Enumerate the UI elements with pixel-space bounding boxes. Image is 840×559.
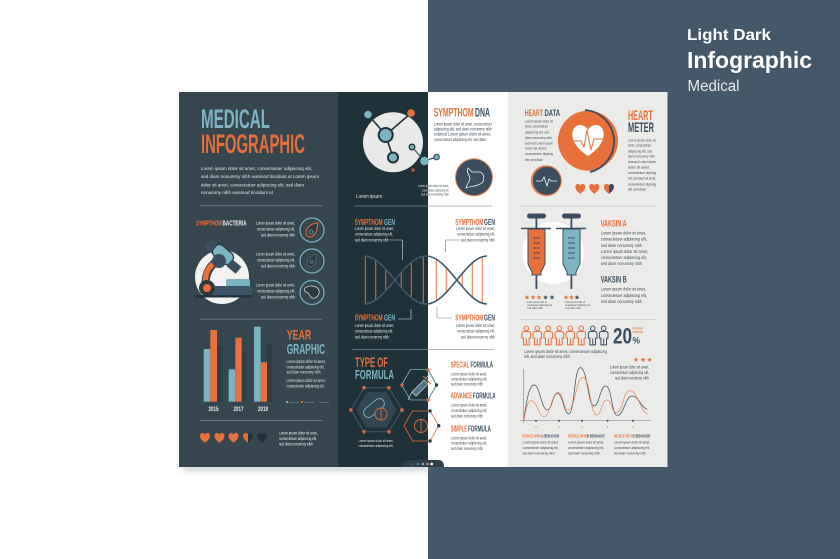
intro text: nonummy nibh euismod tincidunt ut bbox=[201, 190, 274, 196]
dna text bbox=[434, 122, 493, 142]
vaksin a: consectetuer adipiscing elit, bbox=[601, 236, 647, 242]
panel: right light page bbox=[508, 92, 668, 467]
heading: gene bottom left: GEN bbox=[384, 314, 395, 323]
bacteria text blocks: consectetuer adipiscing elit, bbox=[257, 288, 295, 294]
bacteria text blocks: Lorem ipsum dolor sit amet, bbox=[256, 220, 295, 226]
capsule caption: Lorem ipsum dolor sit amet, bbox=[358, 438, 394, 443]
bacteria text blocks: sed diam nonummy nibh bbox=[261, 264, 295, 268]
intro text: sed diam nonummy nibh euismod tincidunt ut Lorem ipsum bbox=[201, 174, 319, 180]
vaksin b bbox=[601, 275, 647, 304]
behaviour column one: PEOPLE WITH bbox=[522, 434, 542, 440]
formula: advance: sed diam nonummy nibh bbox=[451, 413, 483, 418]
main heading: MEDICAL bbox=[201, 104, 270, 134]
capsule caption: consectetuer adipiscing elit, bbox=[358, 443, 394, 448]
gene text bottom right: sed diam nonummy nibh bbox=[461, 335, 495, 340]
hearts text: Lorem ipsum dolor sit amet, bbox=[279, 430, 318, 436]
gene text top right: Lorem ipsum dolor sit amet, bbox=[456, 226, 495, 231]
hearts text: consectetuer adipiscing elit, bbox=[279, 436, 317, 441]
intro text: dolor sit amet, consectetuer adipiscing elit, sed diam bbox=[201, 182, 304, 188]
formula: special: Lorem ipsum dolor sit amet, bbox=[451, 371, 487, 376]
dna text: euismod Lorem ipsum dolor sit amet, bbox=[434, 132, 491, 136]
vaksin a bbox=[601, 219, 648, 266]
gene text bottom right bbox=[456, 323, 495, 340]
icon: stomach bbox=[455, 158, 493, 196]
heading: symptom bacteria: SYMPTHOM bbox=[196, 218, 222, 228]
gene text top right bbox=[456, 226, 495, 242]
bacteria text blocks: Lorem ipsum dolor sit amet, bbox=[256, 252, 295, 256]
heading: heart meter bbox=[628, 107, 654, 135]
chart note: Lorem ipsum dolor sit amet, bbox=[610, 364, 649, 370]
star rating captions: sed diam nibh bbox=[565, 307, 582, 310]
behaviour column one bbox=[522, 434, 559, 456]
formula: special: SPECIAL bbox=[451, 360, 469, 369]
vaksin b: consectetuer adipiscing elit, bbox=[601, 293, 647, 298]
heart meter text: diam nonummy nibh bbox=[628, 154, 655, 159]
panel: centre dark and white page bbox=[338, 92, 508, 467]
gene text top right: sed diam nonummy nibh bbox=[461, 237, 495, 242]
bacteria text blocks: sed diam nonummy nibh bbox=[261, 294, 295, 300]
intro text bbox=[201, 166, 319, 196]
heading: year graphic: GRAPHIC bbox=[287, 341, 325, 358]
molecule note on dark side bbox=[418, 184, 428, 196]
heading: heart data: DATA bbox=[544, 108, 560, 118]
heading: symptom dna: DNA bbox=[475, 106, 490, 120]
formula: advance bbox=[451, 392, 496, 418]
icon: bacteria three bbox=[300, 280, 324, 304]
heart data text: consectetuer diploing bbox=[525, 151, 553, 156]
hexagon: capsule icon bbox=[349, 386, 404, 434]
behaviour column one: sed diam nonummy nibh bbox=[522, 450, 554, 456]
formula: simple: FORMULA bbox=[468, 425, 491, 434]
icon: microscope bbox=[194, 239, 252, 304]
heart data text: diam nonummy nibh bbox=[525, 135, 552, 140]
behaviour column two bbox=[568, 434, 605, 456]
bar chart: 2015 bbox=[208, 407, 219, 413]
behaviour column three: Lorem ipsum dolor sit amet, bbox=[614, 440, 650, 444]
heart meter text: adipiscing elit, sed bbox=[628, 148, 652, 153]
behaviour column two: Lorem ipsum dolor sit amet, bbox=[568, 440, 604, 444]
heart data text: dolor sit amet, bbox=[525, 146, 547, 151]
molecule note on dark side: Lorem ipsum dolor sit amet, bbox=[418, 184, 449, 188]
star rating captions: Lorem ipsum dolor sit bbox=[565, 301, 585, 304]
gene text bottom right: consectetuer adipiscing elit, bbox=[457, 329, 495, 334]
behaviour column one: Lorem ipsum dolor sit amet, bbox=[522, 440, 558, 444]
heart meter text: consectetuer diploing bbox=[628, 181, 656, 186]
brand title: Infographic bbox=[687, 47, 812, 73]
heading: gene top right: SYMPTHOM bbox=[455, 218, 483, 227]
star rating captions: Lorem ipsum dolor sit bbox=[527, 301, 547, 304]
molecule note on white side: sed diam nonummy nibh bbox=[421, 193, 449, 197]
star rating captions: consectetuer adipiscing elit bbox=[527, 304, 552, 307]
molecule note on dark side: sed diam nonummy nibh bbox=[421, 193, 449, 197]
hearts text: sed diam nonummy nibh bbox=[279, 442, 313, 446]
dna text: Lorem ipsum dolor sit amet, consectetuer bbox=[434, 122, 492, 126]
year graphic text: consectetuer adipiscing elit, bbox=[286, 364, 324, 370]
bacteria text blocks: Lorem ipsum dolor sit amet, bbox=[256, 282, 295, 288]
vaksin b: VAKSIN B bbox=[601, 275, 627, 285]
vaksin b: sed diam nonummy nibh bbox=[601, 299, 642, 304]
heart meter text: Lorem ipsum dolor sit bbox=[628, 137, 657, 142]
stat: 20 percent: % bbox=[632, 335, 640, 345]
formula: special: consectetuer adipiscing elit, bbox=[451, 377, 487, 382]
heading: heart meter: HEART bbox=[628, 107, 653, 123]
heart data text: Lorem ipsum dolor sit bbox=[525, 118, 554, 123]
intro text: Lorem ipsum dolor sit amet, consectetuer adipiscing elit, bbox=[201, 166, 312, 172]
heading: gene bottom right: GEN bbox=[484, 314, 495, 323]
leader lines bbox=[390, 240, 460, 319]
heart data text bbox=[525, 118, 554, 162]
main heading: INFOGRAPHIC bbox=[201, 129, 305, 159]
molecule note on dark side: consectetuer adipiscing elit, bbox=[422, 188, 449, 192]
gene text bottom right: Lorem ipsum dolor sit amet, bbox=[456, 323, 495, 328]
gene text top left: Lorem ipsum dolor sit amet, bbox=[355, 226, 394, 231]
vaksin a: Lorem ipsum dolor sit amet, bbox=[601, 249, 648, 254]
bacteria text blocks bbox=[256, 220, 295, 300]
gene text bottom left: sed diam nonummy nibh bbox=[355, 335, 389, 340]
bacteria text blocks: sed diam nonummy nibh bbox=[261, 232, 295, 238]
chart note bbox=[610, 364, 649, 381]
behaviour column three bbox=[614, 434, 651, 456]
heading: year graphic: YEAR bbox=[287, 326, 311, 342]
gene text bottom left: Lorem ipsum dolor sit amet, bbox=[355, 323, 394, 328]
formula: special bbox=[451, 360, 493, 387]
heading: symptom dna: SYMPTHOM bbox=[434, 106, 474, 120]
panel: left dark page bbox=[179, 92, 338, 467]
gene text top left: consectetuer adipiscing elit, bbox=[355, 232, 393, 237]
capsule caption bbox=[358, 438, 394, 448]
chart legend: Lorem ipsum bbox=[289, 402, 299, 404]
heading: gene bottom left: SYMPTHOM bbox=[355, 314, 383, 323]
gene text bottom left: consectetuer adipiscing elit, bbox=[355, 329, 393, 334]
people pictogram bbox=[522, 326, 608, 345]
year graphic text bbox=[286, 359, 326, 388]
formula: simple: SIMPLE bbox=[451, 425, 468, 434]
heading: gene top right: GEN bbox=[484, 218, 495, 227]
gene text top left: sed diam nonummy nibh bbox=[355, 237, 389, 242]
vaksin a: consectetuer adipiscing elit, bbox=[601, 255, 647, 260]
heading: gene top left: SYMPTHOM bbox=[355, 218, 383, 227]
heart meter text: amet, consectetuer bbox=[628, 143, 651, 148]
vaksin a: sed diam nonummy nibh bbox=[601, 261, 642, 266]
dna text: adipiscing elit, sed diam nonummy nibh bbox=[434, 126, 493, 132]
main heading bbox=[201, 104, 305, 159]
people text: elit, sed diam nonummy nibh bbox=[524, 354, 570, 359]
dna text: consectetuer adipiscing elit, sed diam bbox=[434, 137, 486, 142]
molecule note on white side: Lorem ipsum dolor sit amet, bbox=[418, 184, 449, 188]
vaksin b: Lorem ipsum dolor sit amet, bbox=[601, 286, 646, 292]
heading: heart data: HEART bbox=[525, 108, 543, 118]
behaviour column three: PEOPLE WITH bbox=[614, 434, 633, 440]
heading: type of formula bbox=[355, 355, 394, 382]
heart meter text: euismod Lorem ipsum bbox=[628, 159, 656, 164]
star rating captions: consectetuer adipiscing elit bbox=[565, 304, 590, 307]
chart legend: Lorem ipsum bbox=[304, 402, 314, 404]
molecule note on white side bbox=[428, 184, 449, 196]
syringe orange bbox=[521, 214, 551, 289]
line chart bbox=[520, 368, 651, 428]
panel shadow bbox=[183, 465, 428, 471]
bacteria text blocks: consectetuer adipiscing elit, bbox=[257, 226, 295, 232]
heart data text: adipiscing elit, sed bbox=[525, 129, 549, 134]
behaviour column three: consectetuer adipiscing elit, bbox=[614, 445, 650, 450]
formula: special: FORMULA bbox=[470, 360, 493, 369]
behaviour column two: B BEHAVIOR bbox=[587, 434, 605, 440]
behaviour column one: A BEHAVIOR bbox=[542, 434, 559, 440]
formula: simple: sed diam nonummy nibh bbox=[451, 446, 483, 451]
heart meter text bbox=[628, 137, 657, 192]
star ratings bbox=[525, 295, 579, 299]
syringe blue bbox=[556, 214, 586, 289]
vaksin a: sed diam nonummy nibh bbox=[601, 243, 642, 248]
gene text bottom left bbox=[355, 323, 394, 340]
behaviour column three: C BEHAVIOR bbox=[633, 434, 651, 440]
icon: pulse circle bbox=[531, 165, 562, 196]
gene text top right: consectetuer adipiscing elit, bbox=[457, 232, 495, 237]
heading: heart meter: METER bbox=[628, 119, 654, 135]
brand title: Light Dark bbox=[687, 27, 771, 44]
behaviour column one: consectetuer adipiscing elit, bbox=[522, 445, 558, 450]
heart meter text: dolor sit amet, bbox=[628, 165, 650, 170]
molecule note on white side: consectetuer adipiscing elit, bbox=[422, 188, 449, 192]
heading: type of formula: TYPE OF bbox=[355, 355, 388, 370]
hearts rating bbox=[575, 184, 614, 194]
icon: bacteria one bbox=[300, 218, 324, 242]
pager tab bbox=[401, 460, 444, 467]
year graphic text: sed diam nonummy nibh bbox=[286, 370, 321, 374]
star rating captions: sed diam nibh bbox=[527, 307, 544, 310]
stat: 20 percent: SYMPTOM bbox=[632, 330, 643, 334]
chart note: consectetuer adipiscing elit, bbox=[610, 370, 649, 375]
brand title: Medical bbox=[688, 78, 740, 95]
gene text top left bbox=[355, 226, 394, 242]
bar chart bbox=[204, 327, 272, 413]
bar chart: 2019 bbox=[258, 407, 268, 413]
chart legend: Lorem ipsum bbox=[319, 402, 329, 404]
behaviour column three: sed diam nonummy nibh bbox=[614, 450, 646, 456]
heart meter text: consectetuer diploing bbox=[628, 170, 656, 175]
heading: type of formula: FORMULA bbox=[355, 367, 394, 382]
hexagon: syringe icon bbox=[400, 368, 438, 402]
vaksin a: VAKSIN A bbox=[601, 219, 627, 229]
year graphic text: Lorem ipsum dolor sit amet, bbox=[286, 359, 326, 364]
heading: gene bottom right: SYMPTHOM bbox=[455, 314, 483, 323]
people text bbox=[524, 349, 607, 359]
people text: Lorem ipsum dolor sit amet, consectetuer adipiscing bbox=[524, 349, 607, 354]
vaksin a: Lorem ipsum dolor sit amet, bbox=[601, 230, 646, 236]
year graphic text: consectetuer adipiscing elit, bbox=[286, 384, 324, 388]
behaviour column two: sed diam nonummy nibh bbox=[568, 450, 600, 456]
hearts text bbox=[279, 430, 318, 446]
heart data text: elit, sed diam bbox=[525, 157, 544, 162]
stat: 20 percent: PEOPLE bbox=[632, 326, 643, 330]
dna helix bbox=[364, 256, 487, 304]
formula: advance: FORMULA bbox=[473, 392, 496, 401]
heart meter text: elit, sed diam bbox=[628, 187, 647, 192]
behaviour column two: consectetuer adipiscing elit, bbox=[568, 445, 604, 450]
formula: simple bbox=[451, 425, 491, 451]
formula: simple: consectetuer adipiscing elit, bbox=[451, 440, 487, 445]
formula: advance: Lorem ipsum dolor sit amet, bbox=[451, 403, 487, 408]
bar chart: 2017 bbox=[234, 407, 244, 413]
behaviour column two: PEOPLE WITH bbox=[568, 434, 587, 440]
formula: advance: ADVANCE bbox=[451, 392, 473, 401]
year graphic text: Lorem ipsum dolor sit amet, bbox=[286, 378, 326, 383]
heart data text: amet, consectetuer bbox=[525, 124, 548, 129]
hexagon: tablet icon bbox=[404, 409, 440, 443]
heading: gene top left: GEN bbox=[384, 218, 395, 227]
heart meter text: elit, sed diam sit amet, bbox=[628, 176, 656, 181]
icon: molecule bbox=[363, 109, 439, 172]
heading: symptom bacteria: BACTERIA bbox=[222, 218, 247, 228]
heading: year graphic bbox=[287, 326, 325, 358]
star rating captions bbox=[527, 301, 590, 310]
chart legend bbox=[286, 401, 329, 404]
stat: 20 percent: 20 bbox=[613, 323, 632, 348]
chart note: sed diam nonummy nibh bbox=[615, 376, 649, 381]
heart data text: euismod Lorem ipsum bbox=[525, 140, 553, 145]
formula: special: sed diam nonummy nibh bbox=[451, 382, 483, 387]
icon: syringes bbox=[521, 214, 586, 289]
chart stars bbox=[634, 357, 652, 362]
bacteria text blocks: consectetuer adipiscing elit, bbox=[257, 258, 295, 262]
brand title bbox=[687, 27, 812, 95]
hearts rating bbox=[200, 433, 267, 443]
formula: advance: consectetuer adipiscing elit, bbox=[451, 408, 487, 413]
caption: Lorem ipsum bbox=[356, 194, 382, 200]
formula: simple: Lorem ipsum dolor sit amet, bbox=[451, 435, 487, 440]
icon: bacteria two bbox=[300, 249, 324, 273]
icon: heart meter bbox=[558, 110, 618, 172]
